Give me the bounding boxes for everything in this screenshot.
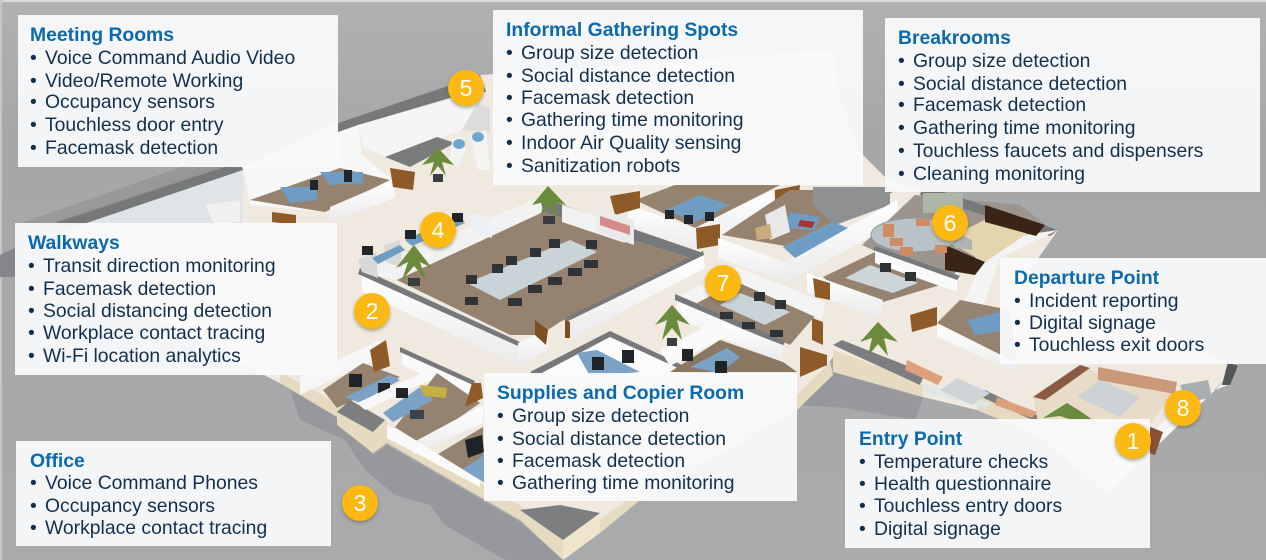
feature list: Walkways: • [28, 278, 35, 300]
back walkway wall [338, 75, 490, 190]
feature list: Supplies and Copier Room: • [497, 405, 504, 427]
meeting room 7 [675, 267, 827, 377]
feature list: Office: • [30, 472, 37, 494]
feature list: Meeting Rooms: • [30, 137, 37, 159]
panel: Breakrooms [885, 18, 1260, 192]
feature list: Entry Point: Touchless entry doors [874, 495, 1062, 517]
heading: Walkways: Walkways [28, 232, 120, 254]
feature list: Entry Point: • [859, 451, 866, 473]
feature list: Informal Gathering Spots: • [506, 42, 513, 64]
entrance lounge [905, 360, 1238, 470]
heading: Informal Gathering Spots: Informal Gathering Spots [506, 19, 738, 41]
plants [396, 148, 1093, 420]
feature list: Entry Point: Health questionnaire [874, 473, 1051, 495]
feature list: Departure Point: Digital signage [1029, 312, 1156, 334]
feature list: Informal Gathering Spots: • [506, 132, 513, 154]
feature list: Breakrooms: Gathering time monitoring [913, 117, 1136, 139]
marker 6: 6 [944, 210, 956, 236]
feature list: Supplies and Copier Room: Gathering time monitoring [512, 472, 735, 494]
feature list: Entry Point: • [859, 473, 866, 495]
marker 1 [1115, 423, 1151, 459]
feature list: Walkways [28, 255, 276, 367]
feature list: Office: • [30, 495, 37, 517]
feature list: Breakrooms: • [898, 94, 905, 116]
feature list: Departure Point: • [1014, 334, 1021, 356]
feature list: Office: Workplace contact tracing [45, 517, 267, 539]
marker 7 [705, 265, 741, 301]
marker 2: 2 [366, 298, 378, 324]
feature list: Office: • [30, 517, 37, 539]
feature list: Meeting Rooms: • [30, 91, 37, 113]
feature list: Departure Point [1014, 290, 1204, 356]
heading: Entry Point: Entry Point [859, 428, 962, 450]
feature list: Breakrooms: Cleaning monitoring [913, 163, 1085, 185]
panel: Meeting Rooms [18, 15, 338, 167]
feature list: Breakrooms: Facemask detection [913, 94, 1086, 116]
feature list: Informal Gathering Spots: Gathering time monitoring [521, 109, 744, 131]
corner wedge wall [1105, 362, 1238, 493]
marker 8: 8 [1177, 395, 1189, 421]
feature list: Meeting Rooms: • [30, 47, 37, 69]
feature list: Entry Point: Digital signage [874, 518, 1001, 540]
feature list: Informal Gathering Spots: • [506, 109, 513, 131]
marker 7: 7 [717, 270, 729, 296]
marker 2 [354, 293, 390, 329]
feature list: Departure Point: Incident reporting [1029, 290, 1178, 312]
feature list: Supplies and Copier Room: Facemask detection [512, 450, 685, 472]
small meeting room [807, 246, 960, 332]
left lower offices [300, 340, 484, 487]
feature list: Walkways: • [28, 255, 35, 277]
feature list: Walkways: • [28, 300, 35, 322]
room B with cabinets [718, 187, 899, 282]
feature list: Breakrooms: • [898, 50, 905, 72]
feature list: Meeting Rooms: Voice Command Audio Video [45, 47, 295, 69]
panel: Supplies and Copier Room [484, 373, 797, 501]
panel: Office [16, 441, 331, 546]
marker 5 [448, 70, 484, 106]
heading: Office: Office [30, 450, 85, 472]
marker 5: 5 [460, 75, 472, 101]
building shadows [0, 150, 925, 560]
heading: Meeting Rooms: Meeting Rooms [30, 24, 174, 46]
feature list: Informal Gathering Spots: • [506, 155, 513, 177]
panel: Entry Point [845, 419, 1150, 548]
marker 3 [342, 485, 378, 521]
feature list: Informal Gathering Spots: Facemask detection [521, 87, 694, 109]
feature list: Walkways: Transit direction monitoring [43, 255, 276, 277]
breakroom [862, 185, 1058, 335]
feature list: Supplies and Copier Room: • [497, 428, 504, 450]
feature list: Meeting Rooms: Occupancy sensors [45, 91, 215, 113]
feature list: Departure Point: • [1014, 312, 1021, 334]
panel: Departure Point [1000, 258, 1266, 364]
feature list: Supplies and Copier Room: • [497, 450, 504, 472]
marker 3: 3 [354, 490, 366, 516]
feature list: Meeting Rooms: • [30, 70, 37, 92]
panel: Walkways [15, 223, 337, 375]
feature list: Breakrooms: • [898, 73, 905, 95]
heading: Breakrooms: Breakrooms [898, 27, 1011, 49]
marker 8 [1165, 390, 1201, 426]
feature list: Walkways: Wi-Fi location analytics [43, 345, 241, 367]
right office [937, 300, 1017, 373]
feature list: Informal Gathering Spots: Social distance detection [521, 65, 735, 87]
upper left office [57, 125, 395, 285]
feature list: Breakrooms [898, 50, 1203, 185]
room A [610, 185, 800, 250]
feature list: Supplies and Copier Room: • [497, 472, 504, 494]
feature list: Breakrooms: • [898, 140, 905, 162]
feature list: Meeting Rooms [30, 47, 295, 159]
feature list: Breakrooms: • [898, 163, 905, 185]
conference room [358, 197, 705, 365]
feature list: Meeting Rooms: Touchless door entry [45, 114, 224, 136]
feature list: Entry Point [859, 451, 1062, 540]
feature list: Office: Voice Command Phones [45, 472, 258, 494]
feature list: Entry Point: • [859, 518, 866, 540]
feature list: Informal Gathering Spots: Indoor Air Quality sensing [521, 132, 741, 154]
feature list: Supplies and Copier Room: Group size detection [512, 405, 689, 427]
feature list: Informal Gathering Spots: • [506, 87, 513, 109]
heading: Departure Point: Departure Point [1014, 267, 1159, 289]
feature list: Departure Point: • [1014, 290, 1021, 312]
feature list: Informal Gathering Spots: • [506, 65, 513, 87]
feature list: Breakrooms: • [898, 117, 905, 139]
feature list: Breakrooms: Group size detection [913, 50, 1090, 72]
feature list: Office [30, 472, 267, 539]
feature list: Walkways: • [28, 322, 35, 344]
lower offices [530, 320, 797, 376]
feature list: Walkways: Social distancing detection [43, 300, 272, 322]
feature list: Meeting Rooms: Video/Remote Working [45, 70, 243, 92]
feature list: Breakrooms: Social distance detection [913, 73, 1127, 95]
panel: Informal Gathering Spots [493, 10, 863, 185]
feature list: Walkways: • [28, 345, 35, 367]
feature list: Walkways: Workplace contact tracing [43, 322, 265, 344]
feature list: Meeting Rooms: • [30, 114, 37, 136]
marker 1: 1 [1127, 428, 1139, 454]
exterior base wall [280, 350, 1037, 560]
marker 4 [420, 212, 456, 248]
feature list: Entry Point: Temperature checks [874, 451, 1048, 473]
feature list: Supplies and Copier Room: Social distance detection [512, 428, 726, 450]
feature list: Departure Point: Touchless exit doors [1029, 334, 1204, 356]
feature list: Office: Occupancy sensors [45, 495, 215, 517]
feature list: Informal Gathering Spots: Sanitization robots [521, 155, 680, 177]
marker 4: 4 [432, 217, 444, 243]
feature list: Informal Gathering Spots: Group size detection [521, 42, 698, 64]
exterior wall tops [337, 340, 1125, 540]
feature list: Breakrooms: Touchless faucets and dispensers [913, 140, 1203, 162]
heading: Supplies and Copier Room: Supplies and Copier Room [497, 382, 744, 404]
feature list: Entry Point: • [859, 495, 866, 517]
feature list: Informal Gathering Spots [506, 42, 744, 177]
feature list: Walkways: Facemask detection [43, 278, 216, 300]
marker 6 [932, 205, 968, 241]
feature list: Meeting Rooms: Facemask detection [45, 137, 218, 159]
feature list: Supplies and Copier Room [497, 405, 735, 494]
